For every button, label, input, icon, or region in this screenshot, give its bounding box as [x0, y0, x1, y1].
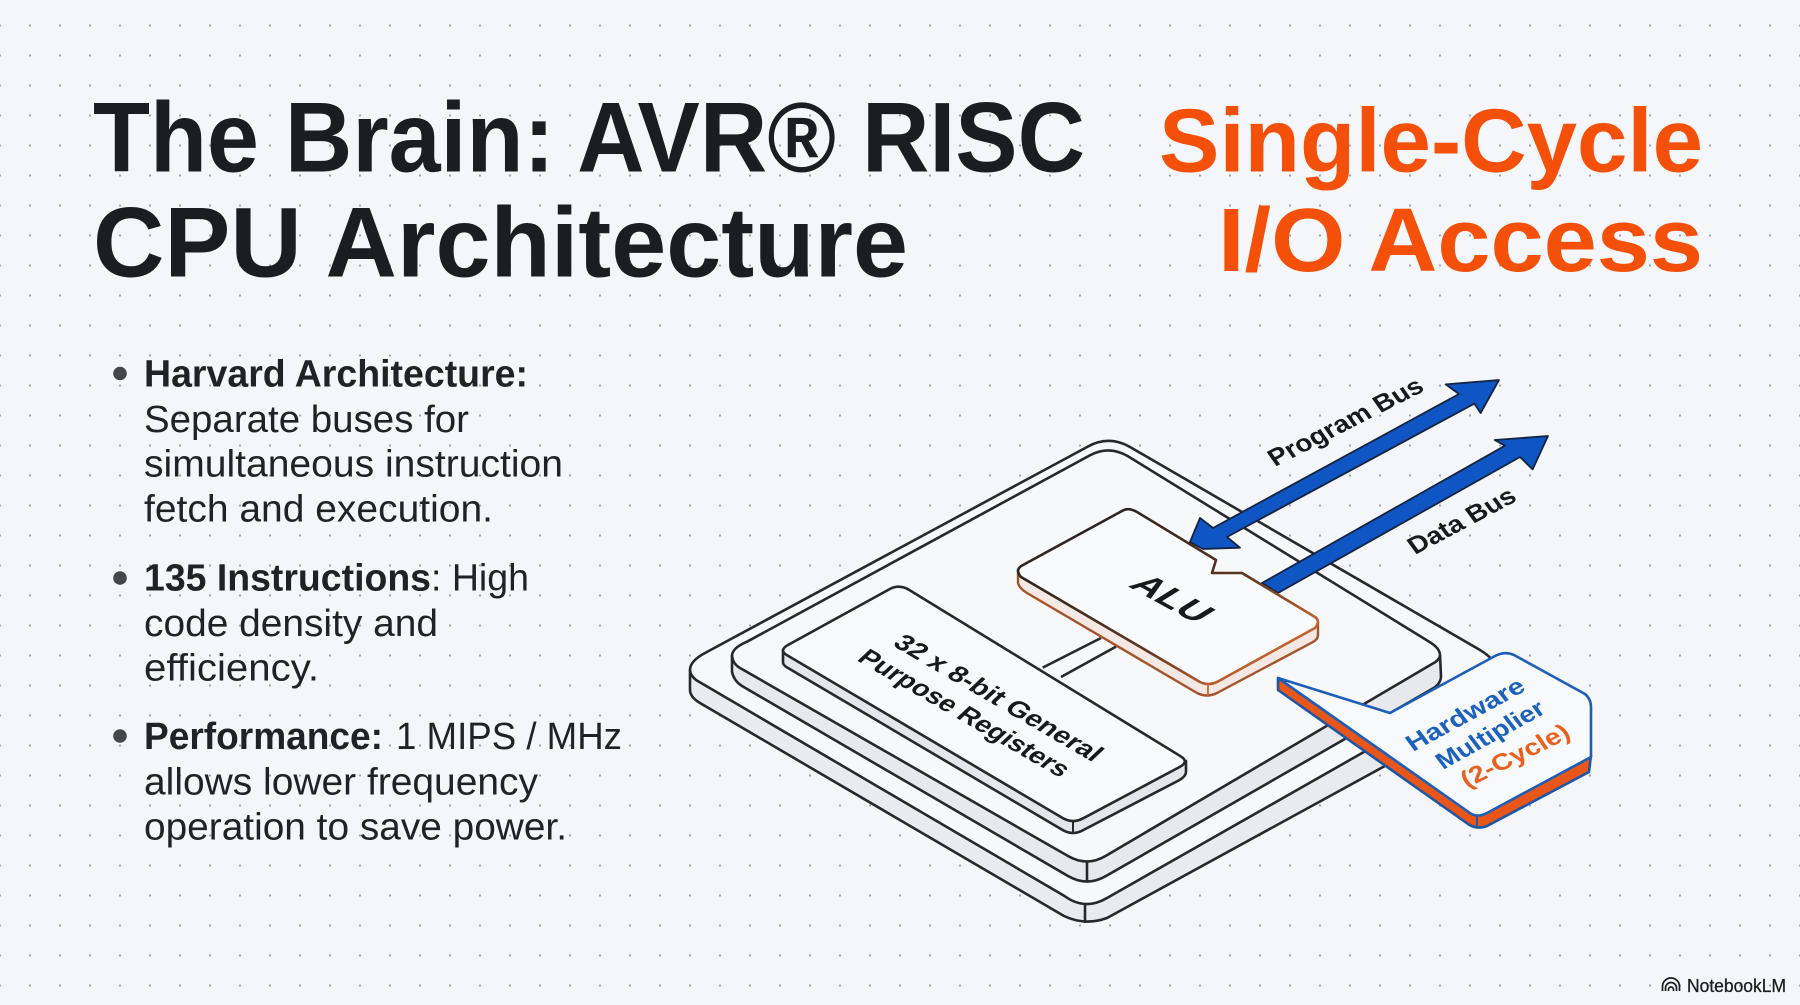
arrow: program bus — [1190, 380, 1499, 549]
bullet: Performance: Performance: — [144, 716, 383, 758]
label: data bus: Data Bus — [1402, 482, 1522, 560]
heading: single-cycle I/O access — [1159, 92, 1703, 291]
registers block — [783, 587, 1186, 834]
registers label: 32 x 8-bit General — [887, 630, 1109, 767]
bullet: Harvard Architecture: fetch and execution. — [144, 489, 493, 531]
bullet: 135 Instructions: : High — [431, 558, 529, 600]
bullet: 135 Instructions: efficiency. — [144, 648, 319, 690]
callout: hardware multiplier — [1278, 653, 1591, 828]
heading: single-cycle I/O access: I/O Access — [1218, 191, 1703, 291]
chip diagram — [690, 372, 1591, 923]
bullet: Performance — [113, 716, 622, 848]
connector lines between registers and ALU — [1043, 638, 1116, 677]
bullet: Performance: operation to save power. — [144, 806, 567, 848]
bullet: Harvard Architecture: simultaneous instruction — [144, 444, 563, 486]
ALU block — [1018, 509, 1318, 696]
middle plate — [732, 450, 1441, 882]
icon: notebook arcs — [1662, 978, 1680, 991]
label: program bus: Program Bus — [1262, 372, 1429, 472]
bullet: Harvard Architecture: Harvard Architecture: — [144, 354, 528, 396]
arrow: data bus — [1262, 436, 1548, 593]
title: The Brain: AVR® RISC — [93, 82, 1085, 193]
ALU label: ALU — [1121, 569, 1225, 628]
bullet: 135 Instructions: code density and — [144, 603, 438, 645]
registers label: Purpose Registers — [852, 645, 1076, 782]
callout text: (2-Cycle) — [1455, 719, 1576, 793]
callout text — [1400, 673, 1576, 793]
title: CPU Architecture — [93, 187, 908, 298]
bullet: 135 Instructions: 135 Instructions — [144, 558, 431, 600]
bullet: Performance: 1 MIPS / MHz — [396, 716, 622, 758]
heading: single-cycle I/O access: Single-Cycle — [1159, 92, 1703, 192]
bullet: Performance: allows lower frequency — [144, 761, 538, 803]
callout text: Hardware — [1400, 673, 1531, 757]
NotebookLM logo: NotebookLM — [1687, 976, 1786, 996]
bullet: 135 Instructions — [113, 558, 529, 690]
bullet: Harvard Architecture — [113, 354, 563, 531]
title — [93, 82, 1085, 298]
base plate — [690, 441, 1510, 923]
bullet: Harvard Architecture: Separate buses for — [144, 399, 469, 441]
callout text: Multiplier — [1430, 695, 1551, 775]
bullet list — [113, 354, 622, 848]
